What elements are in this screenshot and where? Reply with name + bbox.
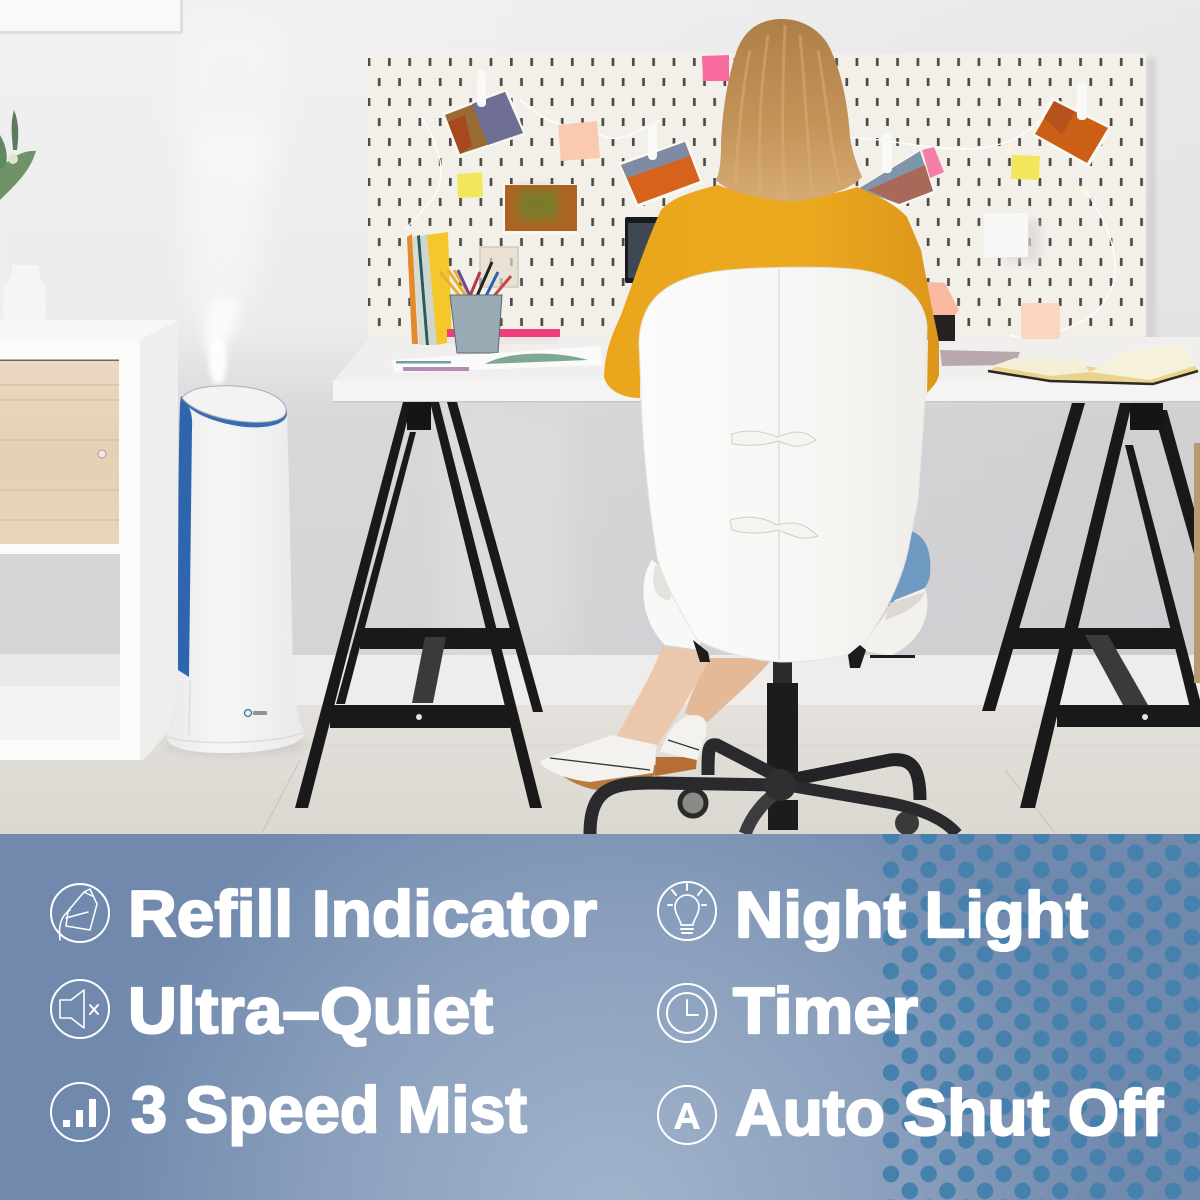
sticky yellow right — [1011, 155, 1040, 180]
sticky note pink top — [702, 55, 729, 81]
small items right of chair — [927, 282, 1060, 341]
halftone dot pattern — [882, 834, 1200, 1200]
woman's hair — [716, 19, 862, 201]
legs — [615, 647, 773, 745]
label: Auto Shut Off — [735, 1076, 1163, 1149]
shoes — [540, 715, 707, 791]
icon: light bulb — [658, 882, 716, 940]
icon: clock — [658, 984, 716, 1042]
right side color sheets — [940, 350, 1020, 366]
pink notebook — [447, 329, 560, 344]
pencil cup — [440, 262, 511, 353]
stack of books — [407, 232, 452, 345]
label: Refill Indicator — [128, 877, 597, 950]
open book on desk — [988, 345, 1198, 384]
label: Night Light — [735, 878, 1088, 951]
icon: muted speaker — [51, 980, 109, 1038]
background: room wall — [0, 0, 1200, 660]
wood drawer — [0, 360, 119, 544]
feature: night light — [658, 878, 1088, 951]
humidifier mist — [174, 20, 283, 384]
chair post and base — [590, 660, 957, 835]
right trestle legs — [982, 403, 1200, 808]
photo middle — [503, 184, 578, 234]
baseboard — [0, 655, 1200, 705]
cardboard box at right edge — [1194, 443, 1200, 683]
chair underside knobs — [693, 640, 915, 668]
clear holder behind pencils — [480, 247, 518, 287]
white holder — [984, 213, 1040, 262]
photo left — [442, 89, 526, 157]
icon: signal bars — [51, 1083, 109, 1141]
desk — [333, 337, 1200, 402]
photo far right — [1032, 97, 1112, 167]
string lights — [405, 100, 1115, 352]
feature: ultra-quiet — [51, 974, 493, 1047]
pinned photos and notes — [442, 55, 1112, 287]
laptop — [625, 217, 660, 283]
icon: letter A — [658, 1086, 716, 1144]
feature panel — [0, 834, 1200, 1200]
color swatch papers — [391, 346, 603, 373]
plant and vases on shelf — [0, 110, 46, 325]
chair seat — [643, 560, 927, 656]
top cap — [182, 386, 287, 427]
label: Timer — [733, 974, 918, 1047]
jeans — [885, 530, 930, 606]
sticky pink right — [922, 147, 944, 178]
pegboard — [368, 53, 1156, 340]
tie bow lower — [730, 517, 818, 538]
feature: refill indicator — [51, 877, 597, 950]
feature: 3 speed mist — [51, 1073, 527, 1146]
feature: auto shut off — [658, 1076, 1163, 1149]
picture frame corner — [0, 0, 183, 34]
icon: pouring water — [51, 884, 109, 942]
white photo clips — [477, 70, 1087, 173]
label: 3 Speed Mist — [131, 1073, 527, 1146]
humidifier tower — [163, 386, 307, 755]
label: Ultra–Quiet — [128, 974, 493, 1047]
chair back cushion — [639, 267, 927, 662]
photo center — [618, 139, 703, 208]
sticky note yellow — [457, 172, 483, 198]
brand logo — [244, 710, 267, 716]
feature: timer — [658, 974, 918, 1047]
photo right of head — [855, 147, 936, 207]
white shelf cabinet — [0, 320, 178, 760]
tie bow upper — [732, 431, 816, 446]
sticky note peach — [558, 121, 600, 161]
blue water tank strip — [178, 396, 192, 677]
yellow sweater — [604, 185, 939, 398]
left trestle legs — [295, 402, 543, 808]
floor — [0, 705, 1200, 835]
